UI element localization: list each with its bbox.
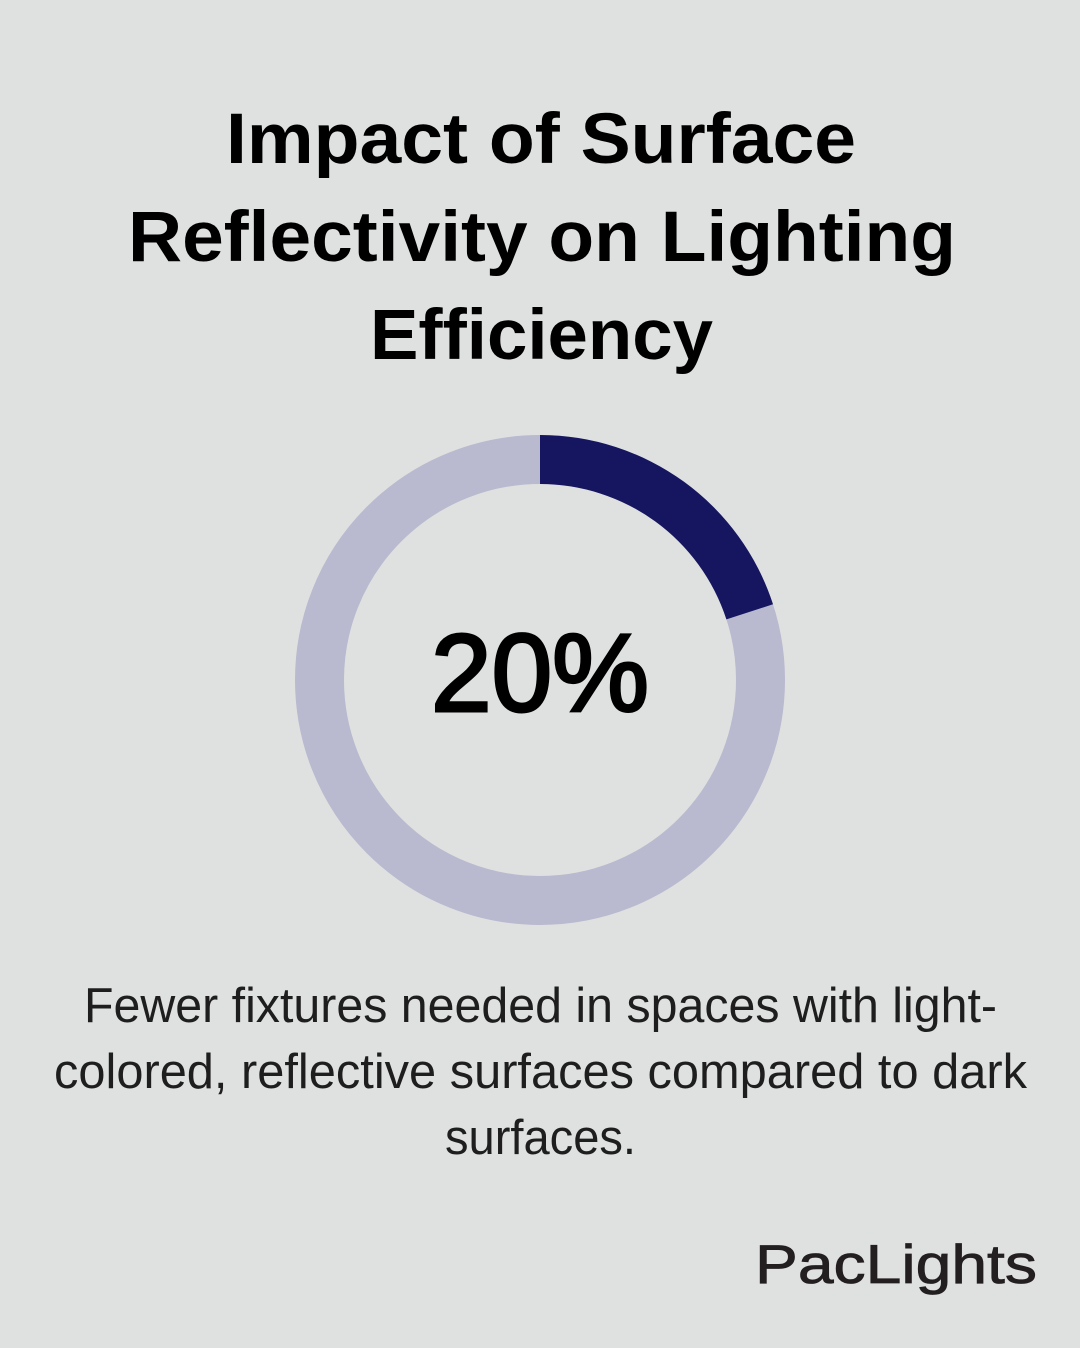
title: Reflectivity on Lighting xyxy=(128,198,956,277)
description text: surfaces. xyxy=(445,1111,636,1165)
donut highlighted segment xyxy=(540,435,773,619)
description text: Fewer fixtures needed in spaces with light- xyxy=(84,979,997,1033)
description text xyxy=(54,979,1027,1165)
donut chart: 20% xyxy=(320,435,773,900)
donut value: 20% xyxy=(431,612,649,735)
title: Impact of Surface xyxy=(226,100,856,179)
description text: colored, reflective surfaces compared to dark xyxy=(54,1045,1027,1099)
logo: PacLights: PacLights xyxy=(755,1233,1037,1295)
title xyxy=(128,100,956,375)
donut track xyxy=(320,460,760,900)
title: Efficiency xyxy=(370,296,714,375)
